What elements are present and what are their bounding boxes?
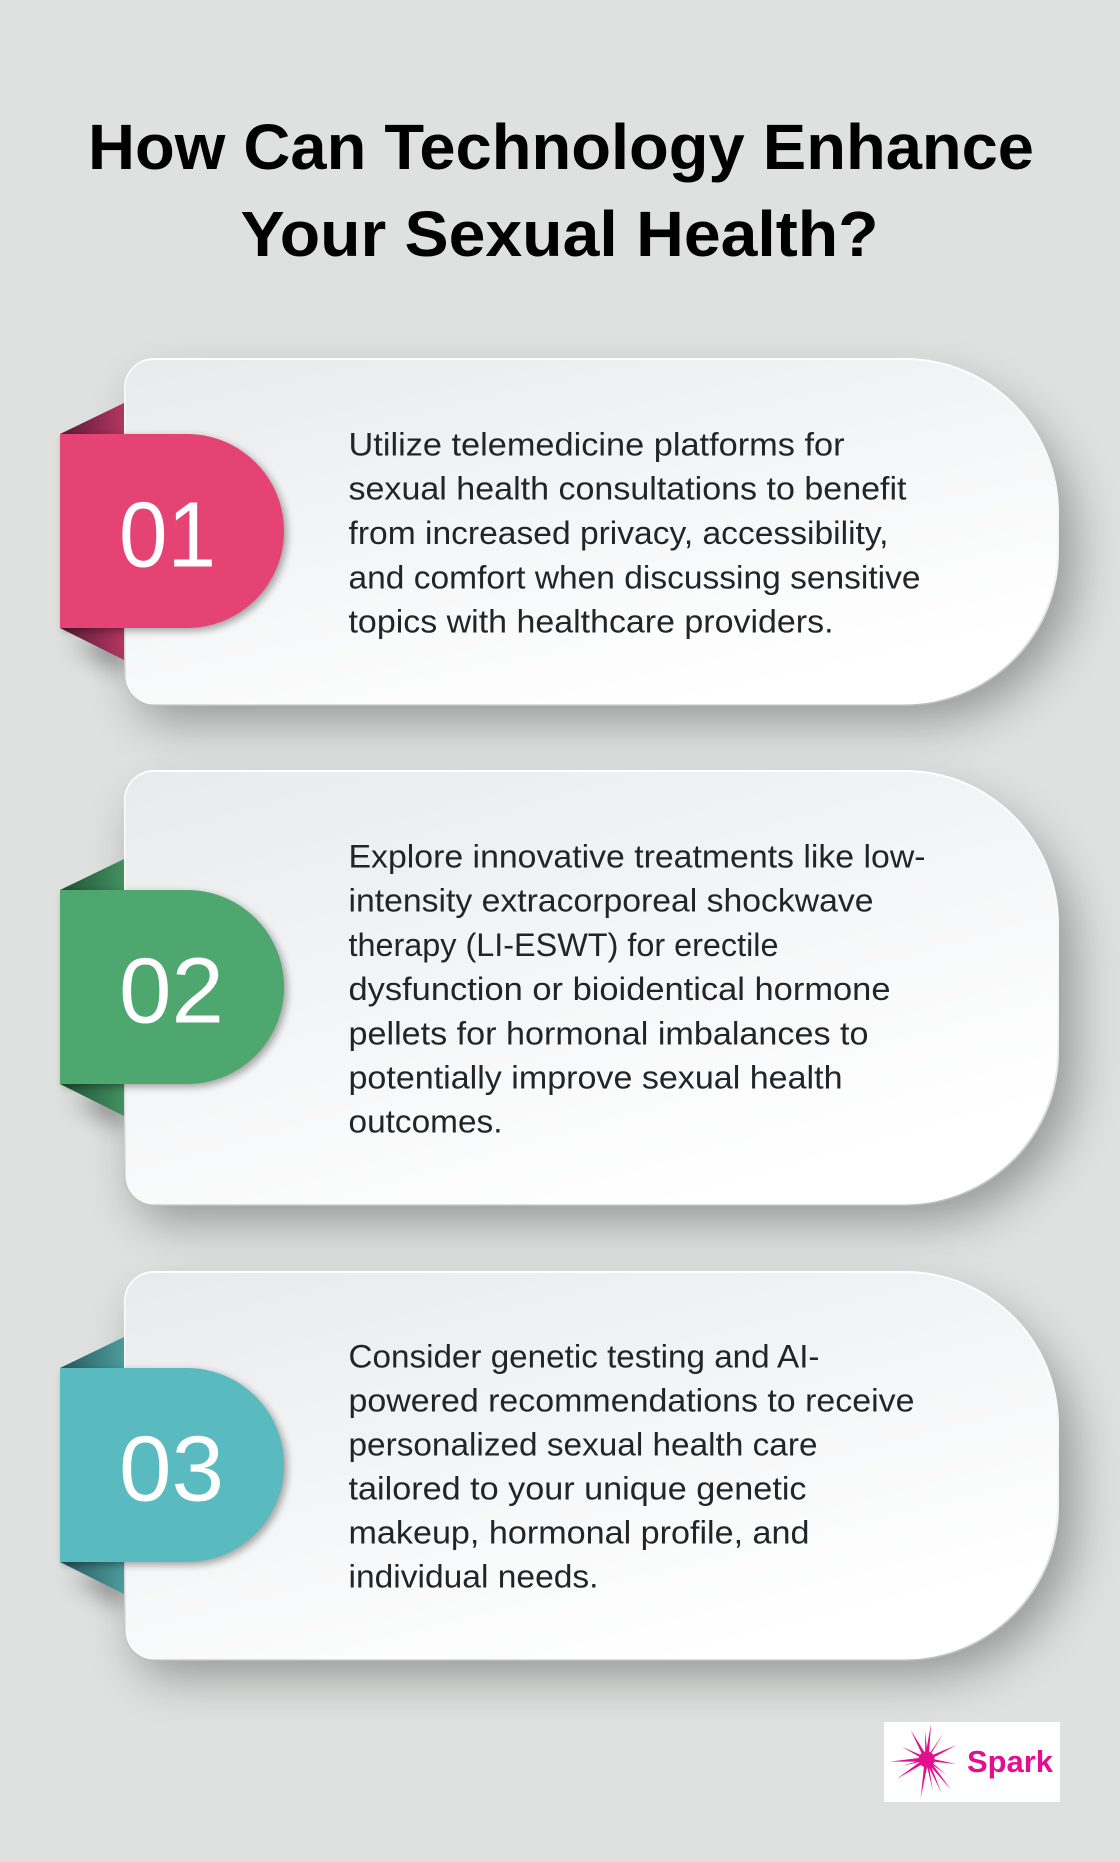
text: step 03: tailored to your unique genetic <box>348 1470 806 1506</box>
number badge: step 01 <box>60 434 287 631</box>
text: step 03: Consider genetic testing and AI- <box>348 1338 820 1374</box>
number badge: step 01: 01 <box>119 482 216 586</box>
panel: step 03 <box>60 1271 1073 1675</box>
panel: step 01 <box>60 358 1073 720</box>
text: step 03: individual needs. <box>348 1558 598 1594</box>
text: step 02 <box>348 838 926 1140</box>
text: step 02: Explore innovative treatments like low- <box>348 838 926 874</box>
text: step 02: intensity extracorporeal shockwave <box>348 882 874 918</box>
text: step 02: therapy (LI-ESWT) for erectile <box>348 927 778 963</box>
text: step 02: dysfunction or bioidentical hormone <box>348 971 890 1007</box>
number badge: step 02: 02 <box>119 938 224 1042</box>
text: step 03: personalized sexual health care <box>348 1426 818 1462</box>
text: step 01: topics with healthcare providers. <box>348 604 834 640</box>
text: step 02: pellets for hormonal imbalances to <box>348 1016 868 1052</box>
text: step 01: sexual health consultations to benefit <box>348 470 907 506</box>
title: How Can Technology Enhance <box>88 111 1034 183</box>
text: step 01: Utilize telemedicine platforms for <box>348 426 845 462</box>
text: step 01 <box>348 426 920 640</box>
folded ribbon: step 01 <box>60 403 124 660</box>
logo: Spark <box>884 1722 1060 1802</box>
title <box>88 111 1034 270</box>
panel: step 02 <box>60 770 1073 1220</box>
text: step 03: powered recommendations to receive <box>348 1382 914 1418</box>
text: step 03 <box>348 1338 914 1594</box>
text: step 01: from increased privacy, accessibility, <box>348 515 888 551</box>
icon: spark burst <box>890 1724 957 1798</box>
text: step 03: makeup, hormonal profile, and <box>348 1514 810 1550</box>
title: Your Sexual Health? <box>240 198 878 270</box>
number badge: step 02 <box>60 890 287 1087</box>
number badge: step 03 <box>60 1368 287 1565</box>
text: step 02: potentially improve sexual health <box>348 1060 842 1096</box>
folded ribbon: step 02 <box>60 859 124 1116</box>
text: step 02: outcomes. <box>348 1104 502 1140</box>
text: step 01: and comfort when discussing sensitive <box>348 560 920 596</box>
number badge: step 03: 03 <box>119 1416 224 1520</box>
logo: Spark: Spark <box>967 1744 1054 1779</box>
folded ribbon: step 03 <box>60 1337 124 1594</box>
